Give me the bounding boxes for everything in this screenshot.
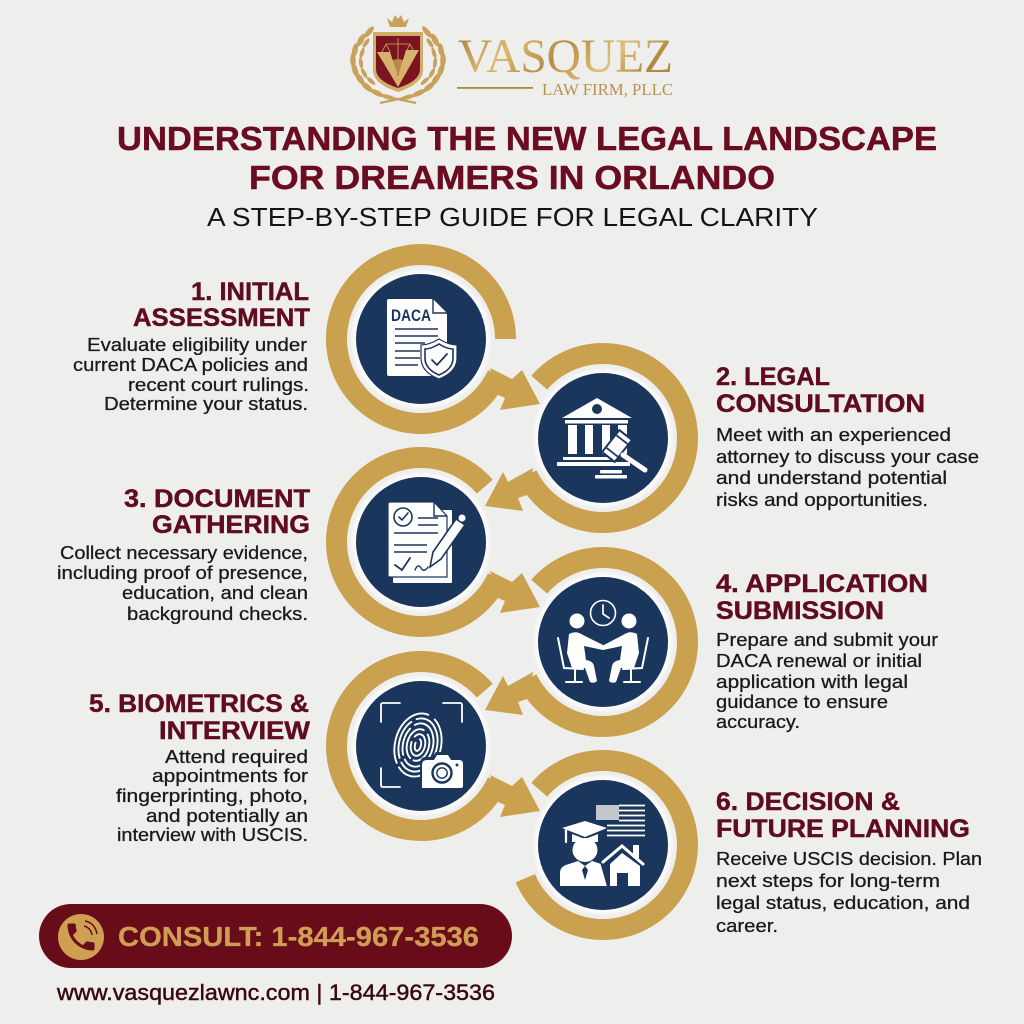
step 1 heading: 1. INITIAL: [191, 278, 309, 306]
icon: graduate, flag and house: [534, 776, 672, 914]
step 3 heading: GATHERING: [152, 511, 310, 539]
title: FOR DREAMERS IN ORLANDO: [249, 159, 775, 196]
step 3 description: background checks.: [127, 604, 308, 624]
step 6 description: next steps for long-term: [716, 871, 940, 891]
step 3 description: education, and clean: [122, 583, 308, 603]
icon: DACA document with shield: DACA: [391, 307, 431, 325]
step 5 description: [116, 747, 308, 845]
step 4 description: DACA renewal or initial: [716, 651, 922, 671]
step 4 heading: 4. APPLICATION: [716, 570, 928, 598]
step 5 description: and potentially an: [146, 806, 308, 826]
step 2 description: attorney to discuss your case: [716, 447, 979, 467]
step 6 heading: 6. DECISION &: [716, 788, 900, 816]
step 4 description: [716, 630, 938, 732]
step 3 heading: 3. DOCUMENT: [124, 485, 310, 513]
title: [117, 120, 937, 196]
logo wordmark: VASQUEZ: [458, 30, 673, 83]
step 6 heading: FUTURE PLANNING: [716, 815, 970, 843]
icon: DACA document with shield: [352, 270, 490, 408]
step 1 heading: [133, 278, 310, 332]
step 3 text: [57, 485, 310, 624]
step 1 description: Evaluate eligibility under: [87, 335, 307, 355]
step 6 text: [716, 788, 982, 936]
step 2 text: [716, 363, 979, 510]
step 2 ring and arrow: [485, 354, 687, 523]
step 3 description: Collect necessary evidence,: [60, 543, 308, 563]
step 1 text: [73, 278, 310, 414]
icon: signed documents with pen: [352, 473, 490, 611]
step 6 heading: [716, 788, 970, 843]
icon: fingerprint and camera: [352, 677, 490, 815]
icon: crown: [387, 15, 409, 27]
step 3 description: [57, 543, 308, 624]
step 3 ring and arrow: [337, 458, 540, 627]
callout: consult phone pill: [39, 904, 512, 968]
icon: shield: [373, 32, 423, 92]
step 1 heading: ASSESSMENT: [133, 304, 310, 332]
step 4 heading: SUBMISSION: [716, 597, 884, 625]
website and phone footer: www.vasquezlawnc.com | 1-844-967-3536: [56, 980, 495, 1005]
step 5 ring and arrow: [337, 662, 540, 831]
step 5 heading: INTERVIEW: [159, 717, 310, 745]
step 2 heading: CONSULTATION: [716, 390, 925, 418]
logo: Vasquez Law Firm: [350, 15, 673, 103]
step 5 text: [89, 690, 310, 845]
step 1 description: recent court rulings.: [128, 375, 309, 395]
logo tagline: LAW FIRM, PLLC: [542, 80, 673, 99]
icon: laurel wreath: [350, 25, 446, 103]
step 5 heading: [89, 690, 310, 745]
title: UNDERSTANDING THE NEW LEGAL LANDSCAPE: [117, 120, 937, 157]
step 6 description: Receive USCIS decision. Plan: [716, 849, 982, 869]
icon: meeting with clock: [534, 573, 672, 711]
step 4 description: Prepare and submit your: [716, 630, 938, 650]
step 5 description: Attend required: [165, 747, 308, 767]
consult text: CONSULT: 1-844-967-3536: [118, 921, 479, 952]
step 2 description: [716, 425, 979, 510]
step 4 description: guidance to ensure: [716, 692, 888, 712]
step 4 description: application with legal: [716, 672, 908, 692]
step 4 description: accuracy.: [716, 712, 800, 732]
step 5 heading: 5. BIOMETRICS &: [89, 690, 309, 718]
step 5 description: appointments for: [152, 766, 308, 786]
step 5 description: interview with USCIS.: [117, 825, 308, 845]
step 1 ring and arrow: [337, 255, 540, 424]
step 3 description: including proof of presence,: [57, 563, 308, 583]
step 6 description: [716, 849, 982, 936]
step 2 description: Meet with an experienced: [716, 425, 951, 445]
step 4 ring and arrow: [485, 558, 687, 727]
step 4 text: [716, 570, 938, 732]
subtitle: A STEP-BY-STEP GUIDE FOR LEGAL CLARITY: [207, 202, 818, 232]
step 2 description: and understand potential: [716, 468, 947, 488]
step 6 ring: [525, 761, 687, 930]
step 2 description: risks and opportunities.: [716, 490, 928, 510]
step 1 description: Determine your status.: [104, 394, 308, 414]
icon: courthouse and gavel: [534, 369, 672, 507]
step 1 description: current DACA policies and: [73, 355, 308, 375]
step 3 heading: [124, 485, 310, 539]
step 5 description: fingerprinting, photo,: [116, 786, 308, 806]
step 2 heading: 2. LEGAL: [716, 363, 830, 391]
step 1 description: [73, 335, 309, 414]
step 2 heading: [716, 363, 925, 418]
step 6 description: legal status, education, and: [716, 893, 970, 913]
step 6 description: career.: [716, 916, 778, 936]
icon: phone: [58, 914, 104, 960]
step 4 heading: [716, 570, 928, 625]
